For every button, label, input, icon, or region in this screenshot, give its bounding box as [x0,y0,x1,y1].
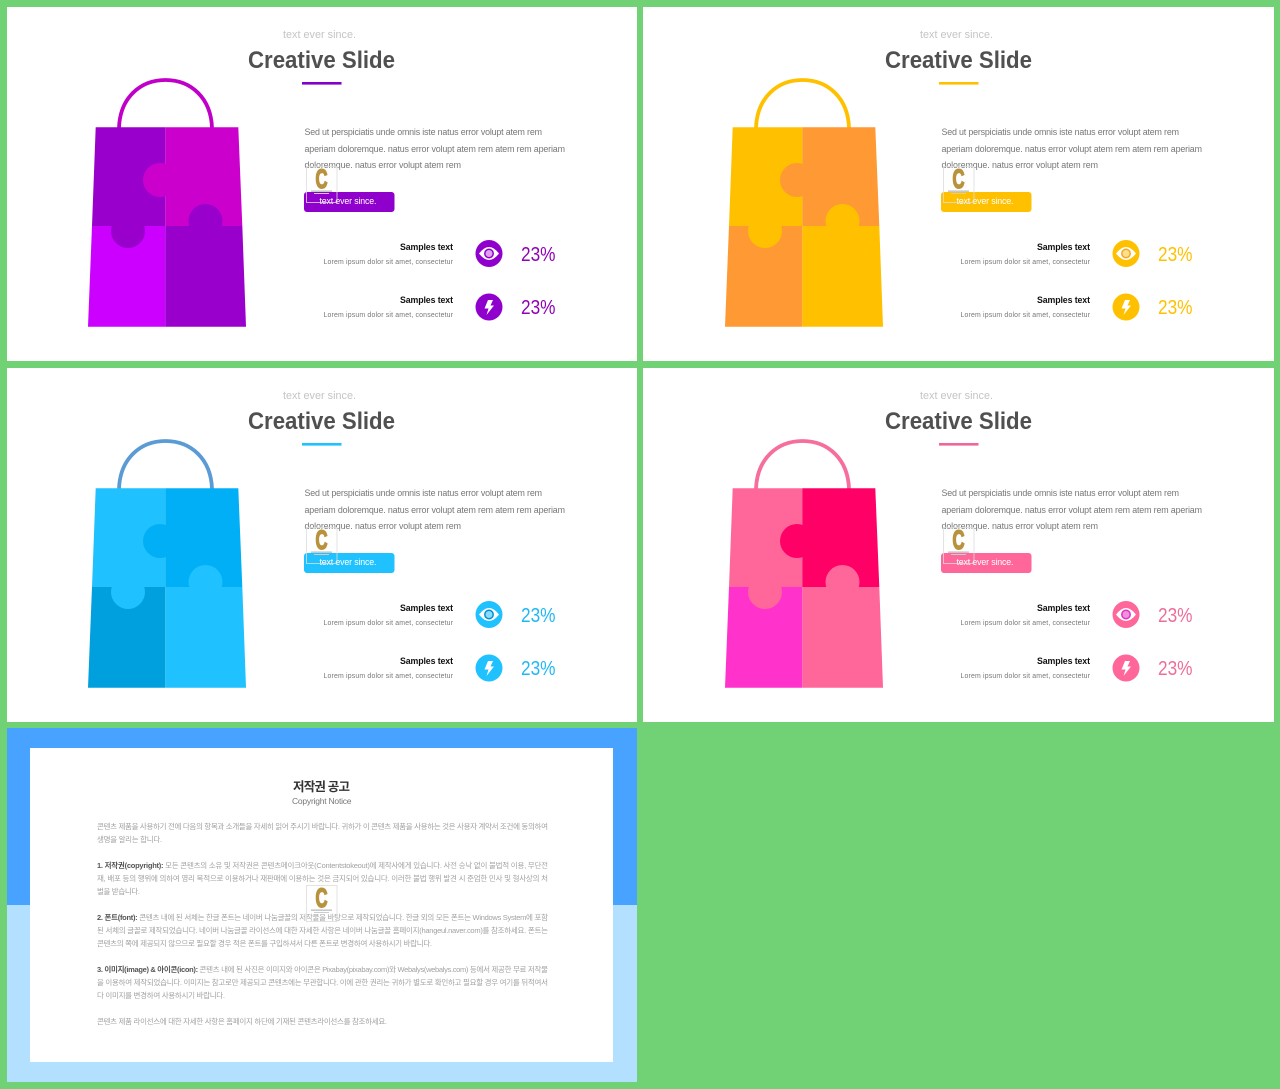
kicker text: text ever since. [283,390,356,402]
paragraph: doloremque. natus error volupt atem rem [304,160,461,170]
button: text ever since. [956,557,1014,567]
paragraph: aperiam doloremque. natus error volupt atem rem atem rem aperiam [942,505,1202,515]
paragraph: Sed ut perspiciatis unde omnis iste natus error volupt atem rem [304,127,542,137]
copyright subheading: Copyright Notice [292,796,352,806]
icon: puzzle shopping bag [88,80,246,327]
icon: puzzle shopping bag [88,441,246,688]
paragraph [304,127,565,170]
button: text ever since. [320,557,376,567]
stat row: bolt: Samples text [1037,656,1090,666]
stat row: bolt [324,294,556,320]
section 1: copyright: 벌을 받습니다. [97,886,140,896]
stat row: bolt: 23% [1158,658,1193,680]
kicker text: text ever since. [920,390,993,402]
section 1: copyright: 재, 배포 등의 행위에 의하여 영리 목적으로 이용하거나 재판매에 이용하는 것은 금지되어 있습니다. 이러한 불법 행위 발견 시 준엄한 민사 및 형사상의 처 [97,873,548,883]
stat row: eye: Lorem ipsum dolor sit amet, consectetur [960,259,1091,266]
intro paragraph: 생명을 알리는 합니다. [97,834,162,844]
stat row: eye [960,240,1193,267]
stat row: eye: Samples text [1037,603,1090,613]
stat row: bolt: Lorem ipsum dolor sit amet, consectetur [324,312,454,319]
paragraph: aperiam doloremque. natus error volupt atem rem atem rem aperiam [942,144,1202,154]
background bands [7,728,637,1082]
panel: pink creative slide [643,368,1274,722]
stat row: eye: 23% [1158,244,1193,266]
icon: watermark C: C [316,164,328,194]
title: Creative Slide [885,408,1032,435]
stat row: bolt: Samples text [1037,295,1090,305]
paragraph: Sed ut perspiciatis unde omnis iste natus error volupt atem rem [942,127,1179,137]
stat row: bolt: 23% [521,297,556,319]
stat row: bolt: Samples text [400,656,453,666]
icon: watermark C [306,525,337,564]
stat row: bolt: 23% [521,658,556,680]
stat row: bolt: Lorem ipsum dolor sit amet, consectetur [960,312,1091,319]
icon: watermark C [944,525,974,564]
section 3: image and icon [97,964,548,1000]
icon: puzzle shopping bag [725,441,883,688]
paragraph: aperiam doloremque. natus error volupt atem rem atem rem aperiam [304,505,565,515]
stat row: bolt: Lorem ipsum dolor sit amet, consectetur [960,673,1091,680]
title: Creative Slide [248,408,395,435]
section 1: copyright: 1. 저작권(copyright): 모든 콘텐츠의 소유 및 저작권은 콘텐츠메이크아웃(Contentstokeout)에 제작사에게 있습니다. 사전 승낙 없이 불법적 이용, 무단전 [97,860,548,870]
paragraph [304,488,565,531]
panel: yellow creative slide [643,7,1274,361]
section 2: font: 된 서체의 글꼴로 제작되었습니다. 네이버 나눔글꼴 라이선스에 대한 자세한 사항은 네이버 나눔글꼴 홈페이지(hangeul.naver.com)를 참조하세요. 폰트는 [97,925,548,935]
stat row: eye: Lorem ipsum dolor sit amet, consectetur [324,620,454,627]
panel: copyright notice [7,728,637,1082]
intro paragraph [97,821,548,844]
icon: puzzle shopping bag [725,80,883,327]
stat row: eye [324,601,556,628]
button [941,553,1032,573]
intro paragraph: 콘텐츠 제품을 사용하기 전에 다음의 항목과 소개들을 자세히 읽어 주시기 바랍니다. 귀하가 이 콘텐츠 제품을 사용하는 것은 사용자 계약서 조건에 동의하여 [97,821,548,831]
paragraph: doloremque. natus error volupt atem rem [942,160,1098,170]
button [941,192,1032,212]
stat row: eye: 23% [1158,605,1193,627]
stat row: eye [324,240,556,267]
section 3: image and icon: 다 이미지를 변경하여 사용하시기 바랍니다. [97,990,225,1000]
paragraph: Sed ut perspiciatis unde omnis iste natus error volupt atem rem [304,488,542,498]
section 1: copyright [97,860,548,896]
title: Creative Slide [885,47,1032,74]
stat row: eye: 23% [521,605,556,627]
section 3: image and icon: 3. 이미지(image) & 아이콘(icon): 콘텐츠 내에 된 사진은 이미지와 아이콘은 Pixabay(pixabay.com)와 Webalys(webalys.com) 등에서 제공한 무료 저작물 [97,964,548,974]
stat row: bolt: 23% [1158,297,1193,319]
title underline [939,443,978,446]
title: Creative Slide [248,47,395,74]
icon: watermark C [306,883,337,922]
stat row: eye: Samples text [1037,242,1090,252]
kicker text: text ever since. [283,29,356,41]
stat row: bolt [960,654,1193,682]
stat row: bolt: Lorem ipsum dolor sit amet, consectetur [324,673,454,680]
button: text ever since. [956,196,1014,206]
icon: watermark C: C [952,525,964,555]
license note: 콘텐츠 제품 라이선스에 대한 자세한 사항은 홈페이지 하단에 기재된 콘텐츠라이선스를 참조하세요. [97,1016,387,1026]
section 2: font [97,912,548,948]
stat row: eye: Lorem ipsum dolor sit amet, consectetur [324,259,454,266]
stat row: eye: Samples text [400,603,453,613]
button [304,192,394,212]
title underline [302,443,342,446]
section 3: image and icon: 을 이용하여 제작되었습니다. 이미지는 참고로만 제공되고 콘텐츠에는 무관합니다. 이에 관한 권리는 귀하가 별도로 확인하고 필요할 경우 여기를 뒤적여서 [97,977,548,987]
paragraph: doloremque. natus error volupt atem rem [942,521,1098,531]
paragraph: Sed ut perspiciatis unde omnis iste natus error volupt atem rem [942,488,1179,498]
copyright heading: 저작권 공고 [293,779,350,794]
button [304,553,394,573]
stat row: eye: Samples text [400,242,453,252]
stat row: eye [960,601,1193,628]
stat row: bolt [324,654,556,682]
paragraph [942,488,1202,531]
paragraph [942,127,1202,170]
stat row: bolt [960,294,1193,320]
button: text ever since. [320,196,376,206]
icon: watermark C: C [952,164,964,194]
section 2: font: 콘텐츠의 쪽에 제공되지 않으므로 필요할 경우 적은 폰트를 구입하셔서 다른 폰트로 변경하여 사용하시기 바랍니다. [97,938,432,948]
section 2: font: 2. 폰트(font): 콘텐츠 내에 된 서체는 한글 폰트는 네이버 나눔글꼴의 저작물을 바탕으로 제작되었습니다. 한글 외의 모든 폰트는 Windows System에 포함 [97,912,548,922]
title underline [939,82,978,85]
icon: watermark C: C [316,525,328,555]
kicker text: text ever since. [920,29,993,41]
stat row: bolt: Samples text [400,295,453,305]
icon: watermark C [944,164,974,202]
white card [30,748,613,1062]
stat row: eye: Lorem ipsum dolor sit amet, consectetur [960,620,1091,627]
stat row: eye: 23% [521,244,556,266]
paragraph: aperiam doloremque. natus error volupt atem rem atem rem aperiam [304,144,565,154]
panel: purple creative slide [7,7,637,361]
panel: blue creative slide [7,368,637,722]
icon: watermark C [306,164,337,202]
paragraph: doloremque. natus error volupt atem rem [304,521,461,531]
title underline [302,82,342,85]
icon: watermark C: C [316,883,328,913]
